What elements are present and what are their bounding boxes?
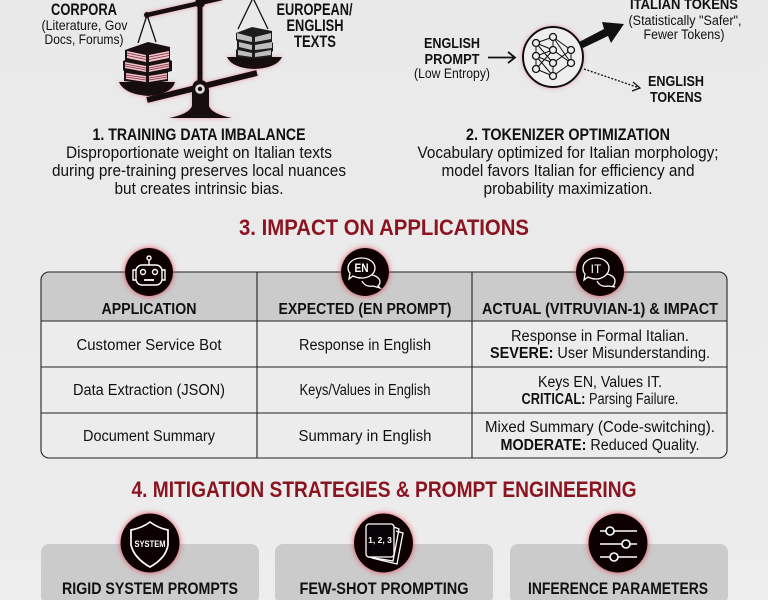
table row: document summary: [83, 419, 715, 454]
icon: italian books: [123, 42, 172, 84]
label: english tokens: ENGLISH: [648, 73, 704, 90]
label: italian corpora: CORPORA: [51, 1, 117, 19]
label: italian tokens: [628, 0, 742, 42]
text: tokenizer description: Vocabulary optimized for Italian morphology;: [418, 144, 718, 162]
text: tokenizer description: model favors Italian for efficiency and: [442, 162, 694, 180]
table header row: EXPECTED (EN PROMPT): [278, 301, 452, 318]
label: english prompt: [414, 35, 490, 81]
table row: data extraction: [73, 374, 678, 408]
icon: neural network: [523, 27, 583, 87]
icon: balance scale: [119, 0, 282, 118]
label: italian tokens: (Statistically "Safer",: [628, 13, 742, 28]
label: english prompt: ENGLISH: [424, 35, 480, 52]
table: impact on applications: [41, 248, 727, 458]
label: italian corpora: Docs, Forums): [44, 31, 124, 47]
label: european english texts: [276, 1, 353, 51]
panel: few-shot prompting: [275, 514, 493, 600]
label: european english texts: ENGLISH: [286, 17, 344, 35]
card title: RIGID SYSTEM PROMPTS: [62, 579, 238, 598]
icon: EN speech bubbles: EN: [354, 261, 368, 275]
table header row: ACTUAL (VITRUVIAN-1) & IMPACT: [482, 301, 718, 318]
table row: data extraction: Data Extraction (JSON): [73, 382, 225, 399]
label: european english texts: EUROPEAN/: [276, 1, 353, 19]
label: english prompt: (Low Entropy): [414, 66, 490, 81]
panel: inference parameters: [510, 514, 728, 600]
icon: IT speech bubbles: [576, 248, 624, 296]
table row: customer service bot: SEVERE: User Misunderstanding.: [490, 345, 710, 362]
heading: tokenizer optimization: 2. TOKENIZER OPTIMIZATION: [466, 125, 670, 144]
icon: english books: [236, 27, 273, 59]
panel: tokenizer optimization: [414, 0, 742, 198]
arrow: model to italian tokens: [579, 22, 624, 48]
text: training data description: Disproportionate weight on Italian texts: [66, 144, 332, 162]
table row: customer service bot: [76, 328, 710, 362]
icon: numbered cards: [354, 514, 413, 572]
heading: impact on applications: 3. IMPACT ON APPLICATIONS: [239, 215, 529, 240]
label: european english texts: TEXTS: [294, 33, 336, 51]
table row: customer service bot: Response in English: [299, 337, 431, 354]
table row: document summary: Document Summary: [83, 428, 215, 445]
table body background: [41, 321, 727, 458]
card title: INFERENCE PARAMETERS: [528, 579, 708, 598]
label: english tokens: TOKENS: [650, 89, 702, 106]
panel: training data imbalance: [42, 0, 353, 198]
icon: sliders: [588, 514, 648, 572]
table row: document summary: Mixed Summary (Code-switching).: [485, 419, 715, 436]
table row: data extraction: CRITICAL: Parsing Failure.: [522, 391, 678, 408]
table header background: [41, 272, 727, 321]
text: training data description: but creates intrinsic bias.: [114, 180, 284, 198]
heading: training data imbalance: 1. TRAINING DATA IMBALANCE: [92, 125, 306, 144]
label: english tokens: [648, 73, 704, 106]
label: english prompt: PROMPT: [424, 51, 480, 68]
icon: numbered cards: 1, 2, 3: [368, 535, 392, 545]
heading: mitigation strategies: 4. MITIGATION STRATEGIES & PROMPT ENGINEERING: [132, 477, 636, 502]
table header row: APPLICATION: [102, 301, 196, 318]
table row: document summary: Summary in English: [298, 428, 432, 445]
table row: document summary: MODERATE: Reduced Quality.: [500, 437, 700, 454]
text: training data description: [52, 144, 346, 198]
card title: FEW-SHOT PROMPTING: [300, 579, 468, 598]
table row: customer service bot: Response in Formal Italian.: [511, 328, 689, 345]
arrow: prompt to model: [488, 52, 515, 63]
text: tokenizer description: [418, 144, 718, 198]
panel: rigid system prompts: [41, 514, 259, 600]
table row: customer service bot: Customer Service Bot: [76, 337, 222, 354]
label: italian tokens: Fewer Tokens): [644, 27, 724, 42]
icon: IT speech bubbles: IT: [591, 262, 602, 276]
table header row: [102, 301, 718, 318]
icon: system shield: [120, 514, 180, 572]
icon: system shield: SYSTEM: [134, 539, 166, 550]
label: italian corpora: [42, 1, 128, 47]
text: training data description: during pre-training preserves local nuances: [52, 162, 346, 180]
arrow: model to english tokens: [584, 69, 640, 91]
icon: robot: [125, 248, 173, 296]
icon: EN speech bubbles: [341, 248, 389, 296]
table row: data extraction: Keys EN, Values IT.: [538, 374, 662, 391]
table row: data extraction: Keys/Values in English: [300, 382, 430, 399]
text: tokenizer description: probability maximization.: [484, 180, 652, 198]
label: italian corpora: (Literature, Gov: [42, 17, 128, 33]
